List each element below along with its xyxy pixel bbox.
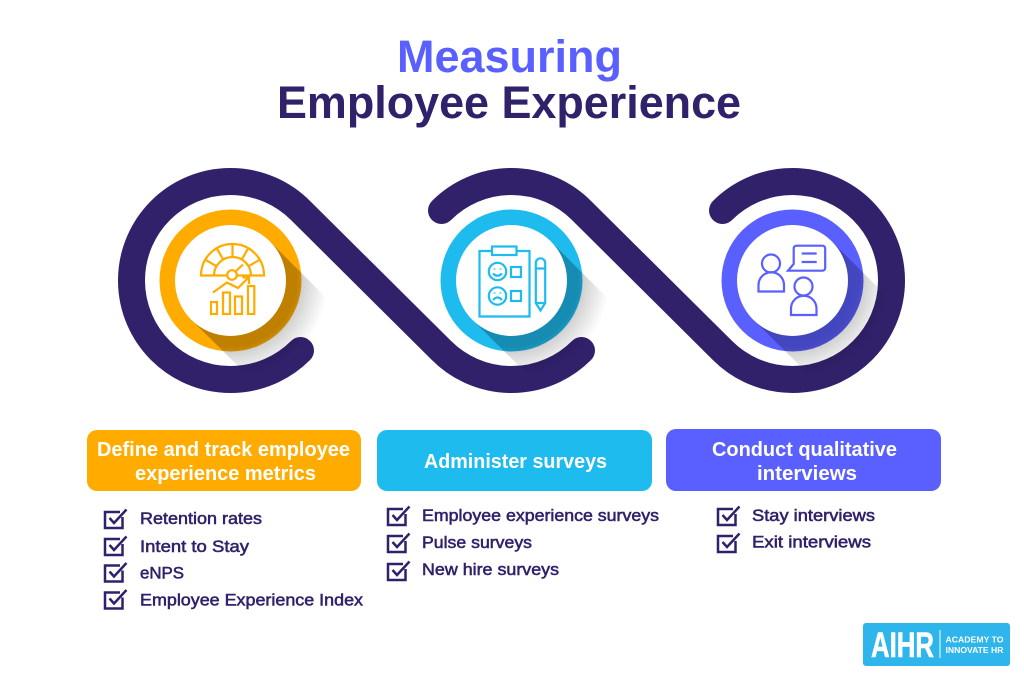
panel: administer surveys: Administer surveys	[424, 451, 607, 473]
panel: conduct qualitative interviews: interviews	[757, 463, 857, 485]
checklist: surveys: Employee experience surveys	[422, 506, 659, 525]
checklist: metrics: Employee Experience Index	[140, 590, 364, 610]
checklist: surveys	[388, 506, 659, 580]
panel: define and track metrics: Define and track employee	[97, 439, 350, 461]
panel: administer surveys	[377, 430, 652, 491]
logo: AIHR: INNOVATE HR	[946, 646, 1004, 655]
icon: survey clipboard and pencil	[480, 246, 545, 316]
ribbon: infinity loop connector	[131, 182, 892, 380]
logo: AIHR: AIHR	[871, 626, 934, 665]
checklist: interviews: Exit interviews	[752, 532, 871, 552]
circle: surveys	[440, 210, 625, 393]
panel: define and track metrics: experience metrics	[135, 463, 316, 485]
checklist: metrics: Retention rates	[140, 509, 262, 528]
title: Measuring	[397, 31, 622, 82]
logo: AIHR	[863, 623, 1010, 666]
checklist: surveys: New hire surveys	[422, 560, 559, 579]
checklist: surveys: Pulse surveys	[422, 533, 532, 552]
panel: conduct qualitative interviews	[666, 429, 941, 491]
logo: AIHR: ACADEMY TO	[946, 636, 1004, 644]
panel: conduct qualitative interviews: Conduct qualitative	[712, 439, 897, 461]
circle: metrics	[160, 210, 344, 393]
icon: gauge and bar chart	[201, 244, 264, 314]
checklist: metrics: eNPS	[140, 564, 184, 582]
panel: define and track metrics	[87, 430, 361, 491]
title	[277, 31, 741, 128]
checklist: interviews: Stay interviews	[752, 506, 875, 525]
checklist: metrics	[105, 509, 364, 610]
circle: interviews	[722, 210, 906, 393]
icon: people talking	[758, 246, 825, 315]
checklist: metrics: Intent to Stay	[140, 537, 250, 556]
checklist: interviews	[718, 506, 875, 552]
title: Employee Experience	[277, 77, 741, 128]
